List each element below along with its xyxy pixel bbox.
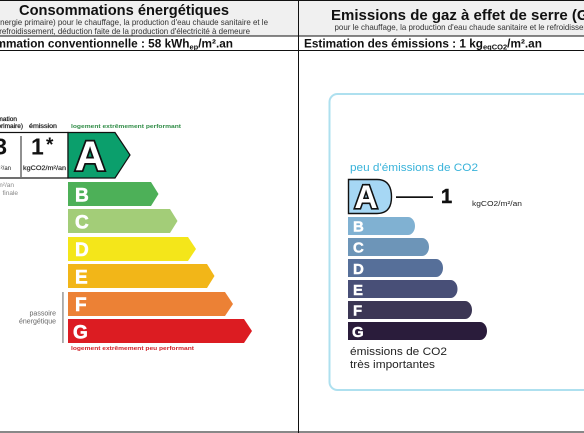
text: estimation des émissions: Estimation des émissions : 1 kg xyxy=(304,36,483,50)
column headings xyxy=(0,116,57,130)
value box: ²/an xyxy=(1,166,11,172)
class B arrow: B xyxy=(75,186,89,206)
panel: energy label xyxy=(0,116,252,352)
class A badge xyxy=(348,179,392,215)
class A arrow: A xyxy=(75,132,105,180)
class D bar: D xyxy=(353,261,364,278)
passoire label: passoire xyxy=(30,310,56,318)
text: consommation conventionnelle: ep xyxy=(189,42,199,52)
passoire bracket xyxy=(62,292,64,343)
class C bar xyxy=(348,238,429,256)
class E arrow xyxy=(68,264,214,288)
panel frame xyxy=(330,94,584,390)
value box: kgCO2/m²/an xyxy=(23,166,66,172)
text: estimation des émissions: /m².an xyxy=(507,36,542,50)
value connector xyxy=(396,196,433,198)
text: consommation conventionnelle: /m².an xyxy=(198,36,233,50)
low emissions heading: peu d'émissions de CO2 xyxy=(350,162,478,174)
class F bar: F xyxy=(353,302,362,320)
class C bar: C xyxy=(353,240,364,256)
class G arrow xyxy=(68,319,252,344)
class F arrow: F xyxy=(75,295,87,316)
class E bar xyxy=(348,280,458,299)
passoire label xyxy=(19,310,56,326)
class G bar: G xyxy=(352,324,364,341)
class A badge: A xyxy=(354,179,378,215)
panel: CO2 label xyxy=(330,94,584,390)
class D arrow: D xyxy=(75,240,89,261)
value: 1 xyxy=(441,186,452,208)
class F bar xyxy=(348,301,472,320)
class G bar xyxy=(348,322,487,341)
class E arrow: E xyxy=(75,268,88,288)
final energy note: finale xyxy=(2,190,18,197)
passoire label: énergétique xyxy=(19,318,56,326)
class D arrow xyxy=(68,237,196,261)
class C arrow xyxy=(68,209,178,234)
value box: * xyxy=(46,135,54,156)
class C arrow: C xyxy=(75,212,89,234)
class B arrow xyxy=(68,182,158,206)
high consumption caption: logement extrêmement peu performant xyxy=(71,346,194,352)
heading: consommations énergétiques: refroidissement, déduction faite de la production d'électricité à demeure xyxy=(0,27,251,36)
high emissions caption xyxy=(350,346,447,371)
value box xyxy=(0,132,68,178)
final energy note xyxy=(0,182,18,197)
class A arrow xyxy=(68,132,130,180)
class F arrow xyxy=(68,292,233,316)
unit: kgCO2/m²/an xyxy=(472,199,522,208)
heading: consommations énergétiques: Consommations énergétiques xyxy=(19,2,229,19)
heading: consommations énergétiques xyxy=(0,2,269,36)
high emissions caption: émissions de CO2 xyxy=(350,346,447,358)
text: estimation des émissions: eqCO2 xyxy=(483,42,507,52)
heading: émissions de gaz à effet de serre xyxy=(331,7,584,32)
class E bar: E xyxy=(353,282,363,299)
class D bar xyxy=(348,259,443,278)
low performance heading: logement extrêmement performant xyxy=(71,124,181,130)
column headings: émission xyxy=(29,123,57,130)
class G arrow: G xyxy=(73,322,88,344)
high emissions caption: très importantes xyxy=(350,359,436,371)
value box: 1 xyxy=(31,134,44,160)
class B bar xyxy=(348,217,415,236)
class B bar: B xyxy=(353,218,364,236)
